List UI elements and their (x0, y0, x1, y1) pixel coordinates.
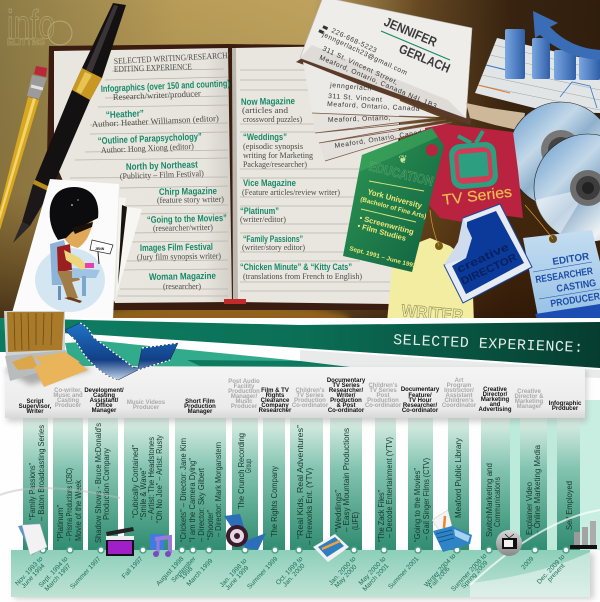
notebook left page text: Research/writer/producer (113, 88, 201, 102)
tag: Writer (387, 210, 474, 325)
job titles: Marketing (515, 399, 544, 405)
timeline dates: 2009 (520, 555, 536, 571)
notebook left page text: SELECTED WRITING/RESEARCH/ (114, 50, 230, 66)
notebook left page text: (Jury film synopsis writer) (137, 251, 221, 262)
timeline dates: Fall 1997 (121, 555, 145, 580)
job titles: Manager (188, 409, 213, 415)
timeline dates: Sept. 1994 to (38, 555, 70, 589)
job titles: Production (367, 398, 399, 404)
timeline dates: Jan. 2000 (282, 562, 307, 589)
tag: Education: ❦ (398, 154, 408, 166)
notebook left page text: (researcher) (163, 281, 201, 291)
tag: roles: EDITOR (552, 251, 591, 268)
timeline text: – Baton Broadcasting Series (37, 425, 46, 521)
timeline dates: Summer 2008 to (450, 552, 489, 593)
tag: TV Series (425, 124, 523, 225)
business card: Jennifer Gerlach: 226-668-5223 (330, 27, 378, 55)
timeline dates: Fall 2006 (428, 565, 452, 590)
timeline text: (LIFE) (351, 512, 360, 530)
notebook left page text: (feature story writer) (157, 194, 224, 205)
timeline dates: Dec. 2009 to (536, 553, 567, 586)
job titles: Children's (295, 388, 325, 394)
icon: bar chart (570, 521, 597, 549)
job titles: Co-ordinator (292, 403, 329, 409)
timeline dates: Oct. 1999 to (275, 555, 305, 587)
notebook left page text (92, 50, 230, 291)
job titles: Creative (483, 387, 508, 393)
timeline dates: September (170, 555, 198, 584)
notebook left page text: “Going to the Movies” (147, 213, 227, 226)
timeline text: – Prisma Productions (CBC) (65, 468, 74, 541)
timeline text: “The Zack Files” (377, 490, 386, 542)
icon: tablet with pencil (313, 534, 349, 562)
notebook left page text: (Publicity – Film Festival) (120, 168, 204, 181)
job titles: Researcher/ (329, 388, 364, 394)
timeline text: Group (244, 459, 253, 473)
timeline dates (14, 552, 567, 593)
timeline text: – Easy Mountain Productions (342, 428, 351, 532)
tag: Education: (Bachelor of Fine Arts) (359, 196, 427, 221)
job titles: Producer (55, 403, 82, 409)
job titles: Director & (514, 394, 544, 400)
icon: film strip (65, 323, 178, 380)
tag: Education: • Screenwriting (358, 213, 415, 237)
timeline dates: Jan. 1998 to (219, 557, 249, 589)
job titles: Program (447, 383, 471, 389)
notebook right page text (240, 96, 362, 281)
timeline text: – Gail Singer Films (CTV) (422, 458, 431, 540)
timeline text: – Director: Mark Morganstern (214, 442, 223, 537)
job titles: Supervisor, (19, 404, 52, 410)
notebook left page text: “Heather” (106, 108, 144, 121)
job titles: Documentary (401, 387, 440, 393)
job titles: TV Series (369, 388, 397, 394)
job titles: Producer (231, 404, 258, 410)
job titles (19, 378, 582, 415)
icon: open book (432, 510, 472, 552)
notebook left page text: EDITING EXPERIENCE (114, 61, 192, 74)
business card stack: jenngerlach (329, 82, 372, 93)
timeline dates: June 1999 (224, 564, 251, 592)
job titles: Art (455, 378, 463, 384)
section title: SELECTED EXPERIENCE: (393, 332, 583, 357)
job titles: Casting (93, 393, 115, 399)
timeline text: “Going to the Movies” (413, 468, 422, 542)
notebook left page text: Chirp Magazine (159, 186, 217, 198)
timeline dates: 1998 (179, 565, 195, 581)
job titles: Production (184, 404, 216, 410)
job titles: Researcher (259, 408, 292, 414)
notebook left page text: “Outline of Parapsychology” (98, 131, 202, 147)
job titles: Assistant/ (90, 398, 119, 404)
job titles: Music (235, 399, 253, 405)
job titles: Marketing (481, 397, 510, 403)
timeline text: – Director: Sky Gilbert (197, 467, 206, 542)
timeline text: “Oh No Joe” – Artist: Rusty (155, 435, 164, 523)
job titles: Director/ (483, 392, 508, 398)
notebook left page text: North by Northeast (126, 159, 199, 173)
timeline dates: June 1994 (20, 562, 47, 590)
timeline text: “I am the Camera Dying” (188, 458, 197, 542)
icon: film reel (224, 514, 266, 550)
timeline text: Communications (493, 477, 502, 527)
job titles: Short Film (185, 399, 215, 405)
job titles: Office (95, 403, 113, 409)
timeline text: The Rights Company (270, 466, 279, 537)
business card: Jennifer Gerlach: GERLACH (397, 41, 452, 76)
notebook right page text: (articles and (242, 105, 289, 115)
notebook right page text: “Family Passions” (243, 234, 303, 245)
job titles: Clearance (261, 398, 290, 404)
job titles: Co-ordinator (328, 408, 365, 414)
job titles: Script (26, 399, 44, 405)
timeline text: Movie of the Week (74, 479, 83, 541)
timeline text (28, 423, 574, 545)
job titles: Writer (26, 409, 44, 415)
timeline base band (0, 488, 600, 599)
timeline text: “Real Kids, Real Adventures” (296, 425, 305, 539)
job titles: Manager/ (231, 394, 258, 400)
job titles: Film & TV (261, 388, 289, 394)
logo: info: ELITTMS (7, 37, 45, 47)
lower background (0, 318, 600, 602)
job titles: Instructor/ (444, 388, 474, 394)
tag: Education: • Film Studies (356, 221, 407, 243)
open notebook (47, 44, 402, 310)
timeline dates: Nov. 1993 to (14, 555, 45, 587)
tag: Education: York University (366, 187, 423, 211)
job titles: TV Hour (408, 398, 432, 404)
job titles: Children's (368, 383, 398, 389)
timeline text: Self Employed (565, 481, 574, 530)
tag: Education (343, 128, 444, 272)
job titles: Researcher/ (403, 403, 438, 409)
timeline dates: Jan. 2000 to (328, 555, 358, 587)
notebook right page text: crossword puzzles) (243, 114, 302, 124)
job titles: Company (261, 403, 289, 409)
timeline dates: Winter 2004 to (423, 552, 458, 589)
job titles: Writer/ (337, 393, 356, 399)
timeline text: “Shooter” (206, 510, 215, 540)
sticker: Creative Director: DIRECTOR (459, 251, 519, 288)
job titles: Development/ (84, 388, 124, 394)
caricature card (10, 179, 142, 320)
job titles: Producer (552, 406, 579, 412)
icon: music note (150, 534, 171, 557)
job titles: Rights (266, 393, 285, 399)
logo: info: info (7, 3, 55, 47)
notebook right page text: writing for Marketing (243, 150, 314, 160)
notebook right page text: (writer/editor) (240, 214, 286, 224)
sticker: Creative Director: creative (455, 241, 511, 276)
timeline dates: Summer 2001 (387, 555, 421, 591)
grey job title panel (5, 367, 587, 422)
job titles: Co-ordinator (365, 403, 402, 409)
job titles: and (490, 402, 501, 408)
timeline text: Meaford Public Library (454, 438, 463, 518)
tag: Education: EDUCATION (367, 158, 435, 189)
timeline text: SwitchMarketing and (485, 463, 494, 537)
timeline dates: Spring 2009 (460, 559, 490, 590)
job titles: Production (330, 398, 362, 404)
timeline dates: Summer 1997 (69, 555, 103, 591)
caricature figure (35, 187, 113, 312)
job titles: Co-ordinator (402, 408, 439, 414)
business card stack: Meaford, Ontario, Canada (334, 129, 427, 150)
notebook right page text: “Platinum” (240, 206, 279, 217)
job titles: Coordinator (442, 403, 477, 409)
timeline text: – Artist: The Headstones (147, 437, 156, 520)
job titles: Production (294, 398, 326, 404)
timeline dates: Summer 1999 (246, 555, 280, 591)
timeline text: Explainer Video (525, 481, 534, 535)
business card: Jennifer Gerlach: JENNIFER (382, 14, 440, 50)
sticker: Creative Director (444, 204, 532, 303)
business card stack (296, 45, 472, 161)
timeline text: The Crunch Recording (237, 433, 246, 509)
business card: Jennifer Gerlach (300, 0, 472, 118)
timeline text: Production Company (102, 448, 111, 520)
chart with 3D bars (475, 11, 600, 113)
job titles: Music and (53, 393, 83, 399)
notebook right page text: Package/researcher) (243, 159, 307, 169)
job titles: Manager (92, 408, 117, 414)
business card: Jennifer Gerlach: 311 St. Vincent Street, (321, 45, 399, 87)
timeline dots (40, 547, 569, 553)
timeline text: – Fireworks Ent. (YTV) (305, 468, 314, 545)
job titles: Infographic (549, 401, 582, 407)
timeline text: – Decode Entertainment (YTV) (385, 437, 394, 538)
notebook left page text: (researcher/writer) (153, 222, 213, 233)
timeline dates: March 1999 (186, 557, 215, 588)
timeline text: “Smile & Wave” (139, 468, 148, 520)
desk background (0, 0, 600, 336)
icon: folders and laptop (4, 311, 92, 387)
torn tape (466, 103, 525, 131)
green title band (0, 318, 600, 378)
notebook right page text: Now Magazine (241, 96, 295, 108)
tag: TV Series: TV Series (441, 184, 513, 209)
icon: documents (18, 523, 47, 555)
notebook right page text: (episodic synopsis (243, 141, 304, 151)
timeline text: Shadow Shows - Bruce McDonald's (94, 423, 103, 543)
timeline text: – Online Marketing Media (533, 444, 542, 535)
notebook left page text: Images Film Festival (140, 242, 213, 254)
timeline text: “Crickets” – Director: Jane Kim (179, 438, 188, 542)
job titles: Post (376, 393, 390, 399)
job titles: & Post (336, 403, 356, 409)
job titles: Creative (517, 389, 542, 395)
job titles: Co-writer, (54, 388, 82, 394)
icon: clapperboard (106, 527, 134, 556)
job titles: TV Series (332, 383, 360, 389)
icon: television badge (496, 530, 522, 556)
timeline dates: August 1998 (155, 555, 186, 587)
timeline dates: May 2000 (334, 563, 359, 590)
notebook left page text: Woman Magazine (149, 271, 216, 283)
fountain pen (13, 3, 126, 243)
notebook right page text: Vice Magazine (243, 178, 296, 189)
timeline dates: present (546, 562, 567, 583)
job titles: Casting (57, 398, 79, 404)
timeline text: “Weddings” (334, 490, 343, 532)
job titles: Advertising (478, 407, 512, 413)
job titles: Documentary (327, 378, 366, 384)
notebook right page text: (Feature articles/review writer) (242, 187, 340, 197)
job titles: Production (228, 389, 260, 395)
business card stack: 311 St. Vincent (328, 93, 383, 104)
job titles: Facility (234, 384, 255, 390)
job titles: Children's (444, 398, 474, 404)
tag: Education: Sept. 1991 – June 1993 (348, 246, 417, 270)
notebook left page text: Infographics (over 150 and counting) (101, 78, 230, 95)
notebook right page text: (translations from French to English) (243, 271, 362, 281)
timeline dates: May 2000 to (358, 555, 388, 587)
job titles: Post Audio (228, 379, 260, 385)
CDs (508, 102, 600, 242)
pencil (0, 66, 47, 230)
business card: Jennifer Gerlach: jenngerlach23@gmail.com (320, 31, 408, 77)
timeline columns (23, 400, 600, 550)
notebook right page text: “Weddings” (243, 132, 287, 143)
timeline text: “Family Passions” (28, 463, 37, 520)
business card stack: Meaford, Ontario, Canada (327, 101, 420, 113)
job titles: Music Videos (127, 400, 166, 406)
job titles: Feature/ (408, 393, 432, 399)
job titles: Assistant (445, 393, 473, 399)
tag: Writer: WRITER (401, 301, 464, 325)
caricature figure: JENN (95, 247, 105, 251)
notebook left page text: Author: Heather Williamson (editor) (92, 113, 219, 129)
timeline dates: March 1997 (44, 562, 73, 593)
job titles: Producer (133, 405, 160, 411)
business card stack: Meaford, Ontario, (328, 115, 391, 124)
notebook right page text: “Chicken Minute” & “Kitty Cats” (240, 262, 352, 273)
timeline dates: March 2001 (362, 562, 391, 593)
job titles: TV Series (296, 393, 324, 399)
job titles: Manager (517, 404, 542, 410)
notebook left page text: Author: Hong Xiong (editor) (101, 141, 194, 155)
tag: roles (523, 205, 600, 327)
business card: Jennifer Gerlach: Meaford, Ontario, Canada N4L 1B3 (318, 54, 438, 110)
notebook right page text: (writer/story editor) (242, 242, 305, 252)
timeline text: “Cubically Contained” (131, 445, 140, 518)
timeline text: “Platinum” (56, 505, 65, 541)
